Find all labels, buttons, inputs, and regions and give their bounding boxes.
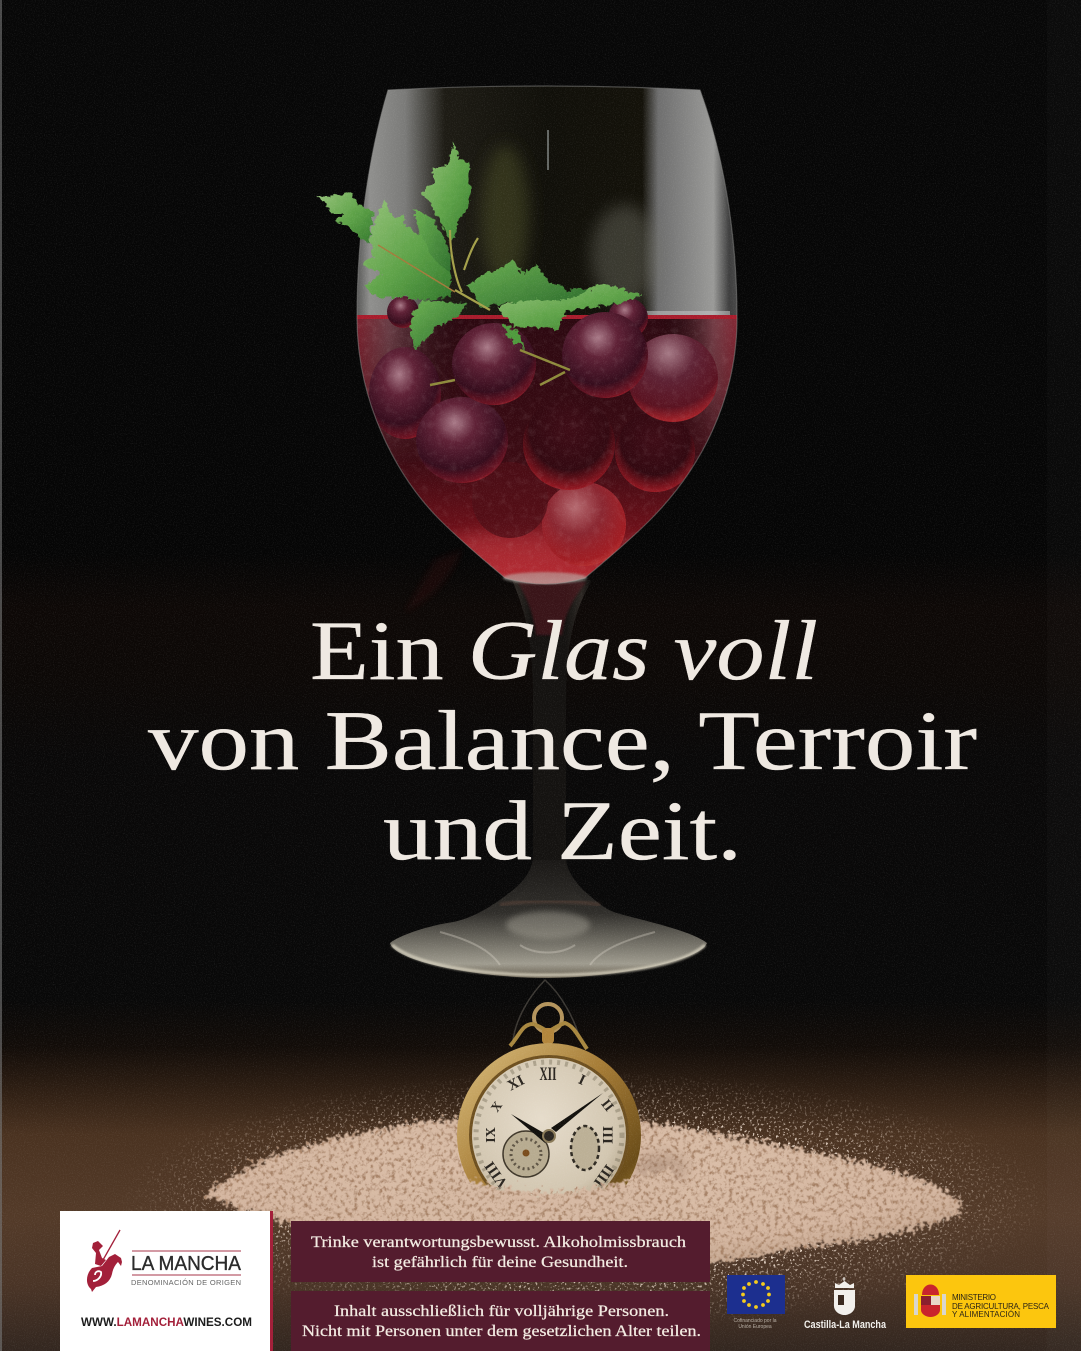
roman numerals: II bbox=[597, 1097, 616, 1115]
leaf: back right of large leaf bbox=[412, 208, 448, 285]
roman numerals bbox=[482, 1064, 617, 1190]
grapes bbox=[369, 296, 718, 566]
watch dial bbox=[472, 1058, 626, 1212]
vine leaves bbox=[314, 140, 640, 348]
grape bbox=[609, 299, 648, 332]
logo name: DENOMINACIÓN DE ORIGEN bbox=[131, 1278, 241, 1287]
panel: responsibility notice bbox=[291, 1221, 710, 1282]
panel: age notice bbox=[291, 1291, 710, 1351]
glass stem bbox=[505, 580, 592, 905]
grape bbox=[542, 482, 626, 566]
icon: coat of arms of Spain bbox=[914, 1284, 946, 1317]
grape bbox=[472, 462, 548, 538]
icon: EU flag: Unión Europea bbox=[738, 1324, 772, 1330]
roman numerals: IX bbox=[484, 1127, 499, 1143]
wine glass bbox=[350, 82, 745, 978]
roman numerals: I bbox=[576, 1072, 588, 1089]
title bbox=[148, 604, 977, 878]
icon: EU flag bbox=[727, 1275, 785, 1330]
leaf: lower left bbox=[408, 298, 465, 348]
panel: La Mancha logo bbox=[60, 1211, 273, 1351]
grape bbox=[387, 296, 419, 328]
panel: responsibility notice: ist gefährlich für deine Gesundheit. bbox=[372, 1254, 628, 1271]
grape bbox=[452, 323, 536, 405]
icon: Don Quixote horse and rider bbox=[87, 1230, 122, 1292]
roman numerals: VIII bbox=[482, 1158, 511, 1190]
watch case bbox=[457, 1043, 641, 1198]
leaf: drop bbox=[500, 322, 522, 348]
roman numerals: III bbox=[599, 1126, 615, 1144]
leaf: centre bbox=[465, 258, 590, 305]
sand pile bbox=[205, 1115, 965, 1268]
panel: age notice: Inhalt ausschließlich für volljährige Personen. bbox=[334, 1303, 669, 1320]
sand specks around pile bbox=[126, 1073, 1044, 1322]
roman numerals: IIII bbox=[590, 1161, 617, 1190]
wine bbox=[350, 318, 745, 600]
panel: Ministerio logo: Y ALIMENTACIÓN bbox=[952, 1310, 1020, 1319]
roman numerals: XI bbox=[505, 1072, 527, 1094]
title: von Balance, Terroir bbox=[148, 694, 977, 788]
grape bbox=[615, 431, 695, 492]
leaf: right bbox=[495, 282, 640, 328]
panel: Ministerio logo: DE AGRICULTURA, PESCA bbox=[952, 1302, 1050, 1311]
leaf: far left bbox=[314, 190, 372, 242]
title: Ein Glas voll bbox=[310, 604, 818, 698]
pocket watch bbox=[415, 980, 690, 1235]
grape bbox=[523, 428, 615, 490]
watch bow bbox=[510, 1004, 587, 1049]
icon: EU flag: Cofinanciado por la bbox=[733, 1318, 777, 1324]
roman numerals: X bbox=[487, 1098, 506, 1115]
icon: Castilla-La Mancha crest bbox=[804, 1277, 887, 1331]
leaf: top bbox=[420, 140, 470, 245]
leaf: large bbox=[360, 197, 450, 298]
panel: responsibility notice: Trinke verantwortungsbewusst. Alkoholmissbrauch bbox=[311, 1234, 686, 1251]
roman numerals: XII bbox=[540, 1064, 556, 1085]
grape bbox=[369, 347, 441, 439]
glass foot bbox=[390, 860, 707, 978]
grape bbox=[628, 334, 718, 422]
panel: age notice: Nicht mit Personen unter dem gesetzlichen Alter teilen. bbox=[302, 1323, 701, 1340]
leaf stems bbox=[378, 230, 490, 310]
grape bbox=[562, 312, 648, 398]
sand in front of watch bbox=[415, 1168, 690, 1235]
title: und Zeit. bbox=[383, 784, 742, 878]
hands bbox=[511, 1114, 549, 1143]
watch chain loop bbox=[513, 980, 580, 1040]
website: WWW.LAMANCHAWINES.COM bbox=[81, 1317, 252, 1329]
icon: Castilla-La Mancha crest: Castilla-La Mancha bbox=[804, 1319, 887, 1331]
logo name: LA MANCHA bbox=[131, 1253, 242, 1275]
glass bowl bbox=[350, 82, 745, 600]
panel: Ministerio logo bbox=[906, 1275, 1056, 1328]
panel: Ministerio logo: MINISTERIO bbox=[952, 1293, 996, 1302]
logo name bbox=[131, 1250, 242, 1287]
grape bbox=[416, 397, 508, 483]
engraving bbox=[571, 1126, 599, 1170]
sub-dial bbox=[503, 1131, 549, 1177]
